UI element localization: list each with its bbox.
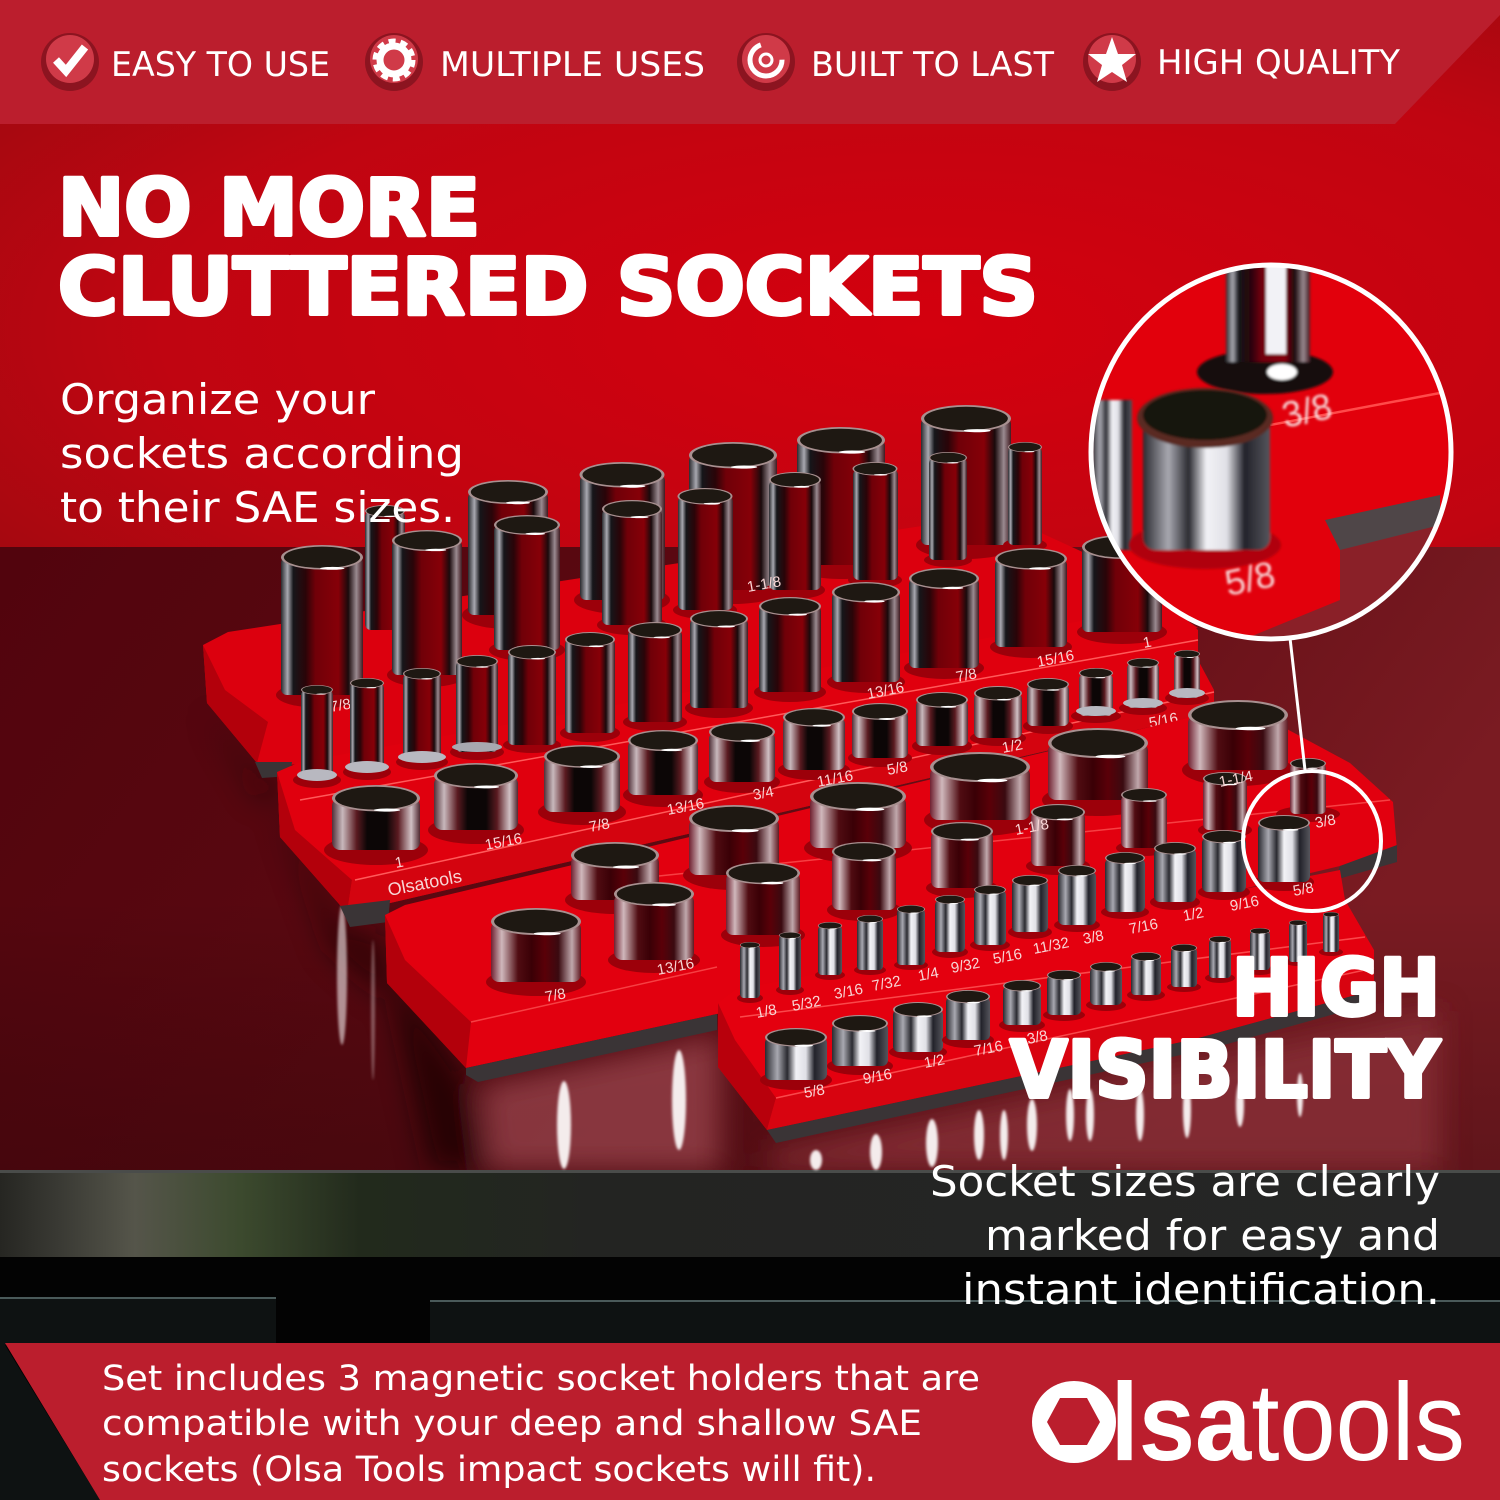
table front edge and cabinet xyxy=(0,1170,1500,1347)
middle tray size labels: 7/8 xyxy=(588,815,611,836)
front tray size labels: 7/16 xyxy=(973,1038,1004,1060)
front tray body xyxy=(718,870,1374,1130)
front tray side shading xyxy=(718,1003,776,1130)
middle tray size labels: 11/16 xyxy=(816,767,855,791)
large tray ridge line xyxy=(471,800,1390,1022)
main heading: CLUTTERED SOCKETS xyxy=(58,243,1038,333)
middle tray magnet base xyxy=(340,900,390,927)
deep sockets row xyxy=(293,535,1167,788)
feature label: easy to use: EASY TO USE xyxy=(111,45,330,85)
intro text block: Organize your xyxy=(60,375,376,424)
middle tray size labels: 1 xyxy=(1142,634,1153,652)
front tray size labels: 9/32 xyxy=(950,955,981,977)
socket holder: front tray with small sockets xyxy=(718,815,1374,1143)
icon: check mark badge xyxy=(41,33,99,91)
lens: size label 3/8: 3/8 xyxy=(1278,385,1336,436)
front tray size labels: 1/2 xyxy=(923,1051,946,1072)
magnifier lens: close-up of size markings xyxy=(1085,260,1460,911)
front tray size labels: 9/16 xyxy=(1229,893,1260,915)
soft tray reflections and shadows on table xyxy=(205,710,1440,1170)
feature label: multiple uses: MULTIPLE USES xyxy=(440,45,705,85)
large tray size labels: 1-1/8 xyxy=(1014,816,1050,839)
middle tray logo: Olsatools xyxy=(386,866,463,900)
middle tray size labels: 5/16 xyxy=(1148,710,1179,732)
feature label: high quality: HIGH QUALITY xyxy=(1157,43,1400,83)
front tray size labels: 5/8 xyxy=(1292,879,1315,900)
front tray ridge lines xyxy=(740,937,1374,1098)
front tray size labels xyxy=(755,879,1315,1102)
set description text: sockets (Olsa Tools impact sockets will fit). xyxy=(102,1450,876,1490)
front tray size labels: 3/16 xyxy=(833,981,864,1003)
high visibility heading: HIGH xyxy=(1232,944,1440,1034)
back tray magnet base xyxy=(255,762,292,778)
back tray side shading xyxy=(203,645,268,763)
large sockets front row xyxy=(486,758,1340,996)
high visibility heading: VISIBILITY xyxy=(1010,1026,1441,1116)
middle tray size labels: 3/4 xyxy=(752,783,775,804)
small sockets back row xyxy=(737,815,1314,1003)
large tray magnet base xyxy=(466,845,1397,1082)
high visibility text block: Socket sizes are clearly xyxy=(930,1157,1440,1206)
small sockets front row xyxy=(760,912,1343,1090)
front tray size labels: 11/32 xyxy=(1032,934,1071,958)
middle tray size labels: 13/16 xyxy=(666,795,706,819)
lens: size label 5/8: 5/8 xyxy=(1221,553,1279,604)
medium deep sockets front row xyxy=(276,442,1047,708)
large tray body xyxy=(385,715,1397,1068)
lens contents xyxy=(1085,260,1460,645)
front tray size labels: 5/16 xyxy=(992,946,1023,968)
middle tray size labels xyxy=(394,634,1179,872)
high visibility text block: marked for easy and xyxy=(985,1211,1440,1260)
middle tray size labels: 13/16 xyxy=(866,679,906,703)
intro text block: sockets according xyxy=(60,429,464,478)
set description text: compatible with your deep and shallow SAE xyxy=(102,1404,922,1444)
middle tray side shading xyxy=(277,772,352,913)
set description text xyxy=(102,1359,980,1490)
front tray face xyxy=(767,968,1374,1130)
icon: gear badge xyxy=(365,33,423,91)
back tray size labels: 1-1/8 xyxy=(746,573,782,596)
front tray size labels: 1/2 xyxy=(1182,904,1205,925)
red wall background xyxy=(0,0,1500,550)
middle tray size labels: 1/2 xyxy=(1001,736,1024,757)
connector line xyxy=(1290,638,1305,770)
front tray size labels: 3/8 xyxy=(1082,927,1105,948)
stainless table surface xyxy=(0,547,1500,1172)
main heading xyxy=(58,164,1038,333)
lens: large socket xyxy=(1129,388,1281,569)
middle tray front face xyxy=(347,692,1214,913)
feature label: built to last: BUILT TO LAST xyxy=(811,45,1054,85)
front tray size labels: 3/8 xyxy=(1026,1027,1049,1048)
back tray size labels xyxy=(329,573,782,716)
logo: Olsatools: Olsatools xyxy=(1032,1361,1465,1484)
middle tray body xyxy=(277,605,1214,913)
large deep sockets back row xyxy=(365,405,1016,630)
back tray body xyxy=(203,514,1198,765)
socket holder: back tray with deep sockets xyxy=(203,405,1198,778)
small target ring xyxy=(1243,771,1381,911)
front tray size labels: 1/4 xyxy=(917,964,940,985)
intro text block xyxy=(60,375,464,532)
large tray size labels: 3/8 xyxy=(1314,811,1337,832)
top banner xyxy=(0,0,1500,124)
high visibility text block: instant identification. xyxy=(962,1265,1440,1314)
middle tray ridge lines xyxy=(300,640,1214,880)
front tray size labels: 7/32 xyxy=(871,973,902,995)
middle tray size labels: 15/16 xyxy=(484,830,524,854)
large tray size labels: 7/8 xyxy=(544,985,567,1006)
intro text block: to their SAE sizes. xyxy=(60,483,455,532)
front tray size labels: 5/8 xyxy=(803,1081,826,1102)
lens ring xyxy=(1091,265,1451,639)
icon: star badge xyxy=(1083,33,1141,91)
large tray size labels xyxy=(544,768,1337,1006)
large tray side shading xyxy=(385,915,471,1068)
lens: upper socket xyxy=(1197,262,1333,394)
middle tray size labels: 5/8 xyxy=(886,758,909,779)
high visibility heading xyxy=(1010,944,1441,1116)
front tray size labels: 5/32 xyxy=(791,993,822,1015)
high visibility text block xyxy=(930,1157,1440,1314)
bottom banner xyxy=(0,1343,1500,1500)
lens: left socket sliver xyxy=(1092,400,1132,550)
back tray size labels: 7/8 xyxy=(329,696,352,716)
large tray size labels: 13/16 xyxy=(656,955,696,979)
front tray size labels: 1/8 xyxy=(755,1001,778,1022)
socket holder: middle tray xyxy=(277,535,1214,927)
icon: durable cycle badge xyxy=(737,33,795,91)
middle tray size labels: 15/16 xyxy=(1036,647,1076,671)
table reflections xyxy=(337,905,1303,1170)
socket holder: large shallow tray xyxy=(385,700,1397,1082)
middle tray size labels: 1 xyxy=(394,854,405,872)
main heading: NO MORE xyxy=(58,164,480,254)
large tray size labels: 1-1/4 xyxy=(1218,768,1254,791)
front tray size labels: 9/16 xyxy=(862,1066,893,1088)
large sockets back row xyxy=(565,700,1294,914)
shallow sockets row xyxy=(324,650,1209,865)
front tray size labels: 7/16 xyxy=(1128,916,1159,938)
middle tray size labels: 7/8 xyxy=(955,665,978,686)
set description text: Set includes 3 magnetic socket holders that are xyxy=(102,1359,980,1399)
front tray magnet base xyxy=(767,990,1374,1143)
lens: tray ridge xyxy=(1270,393,1440,425)
lens: table beyond tray xyxy=(1254,526,1434,636)
lens: rubber magnet strip xyxy=(1325,495,1440,550)
